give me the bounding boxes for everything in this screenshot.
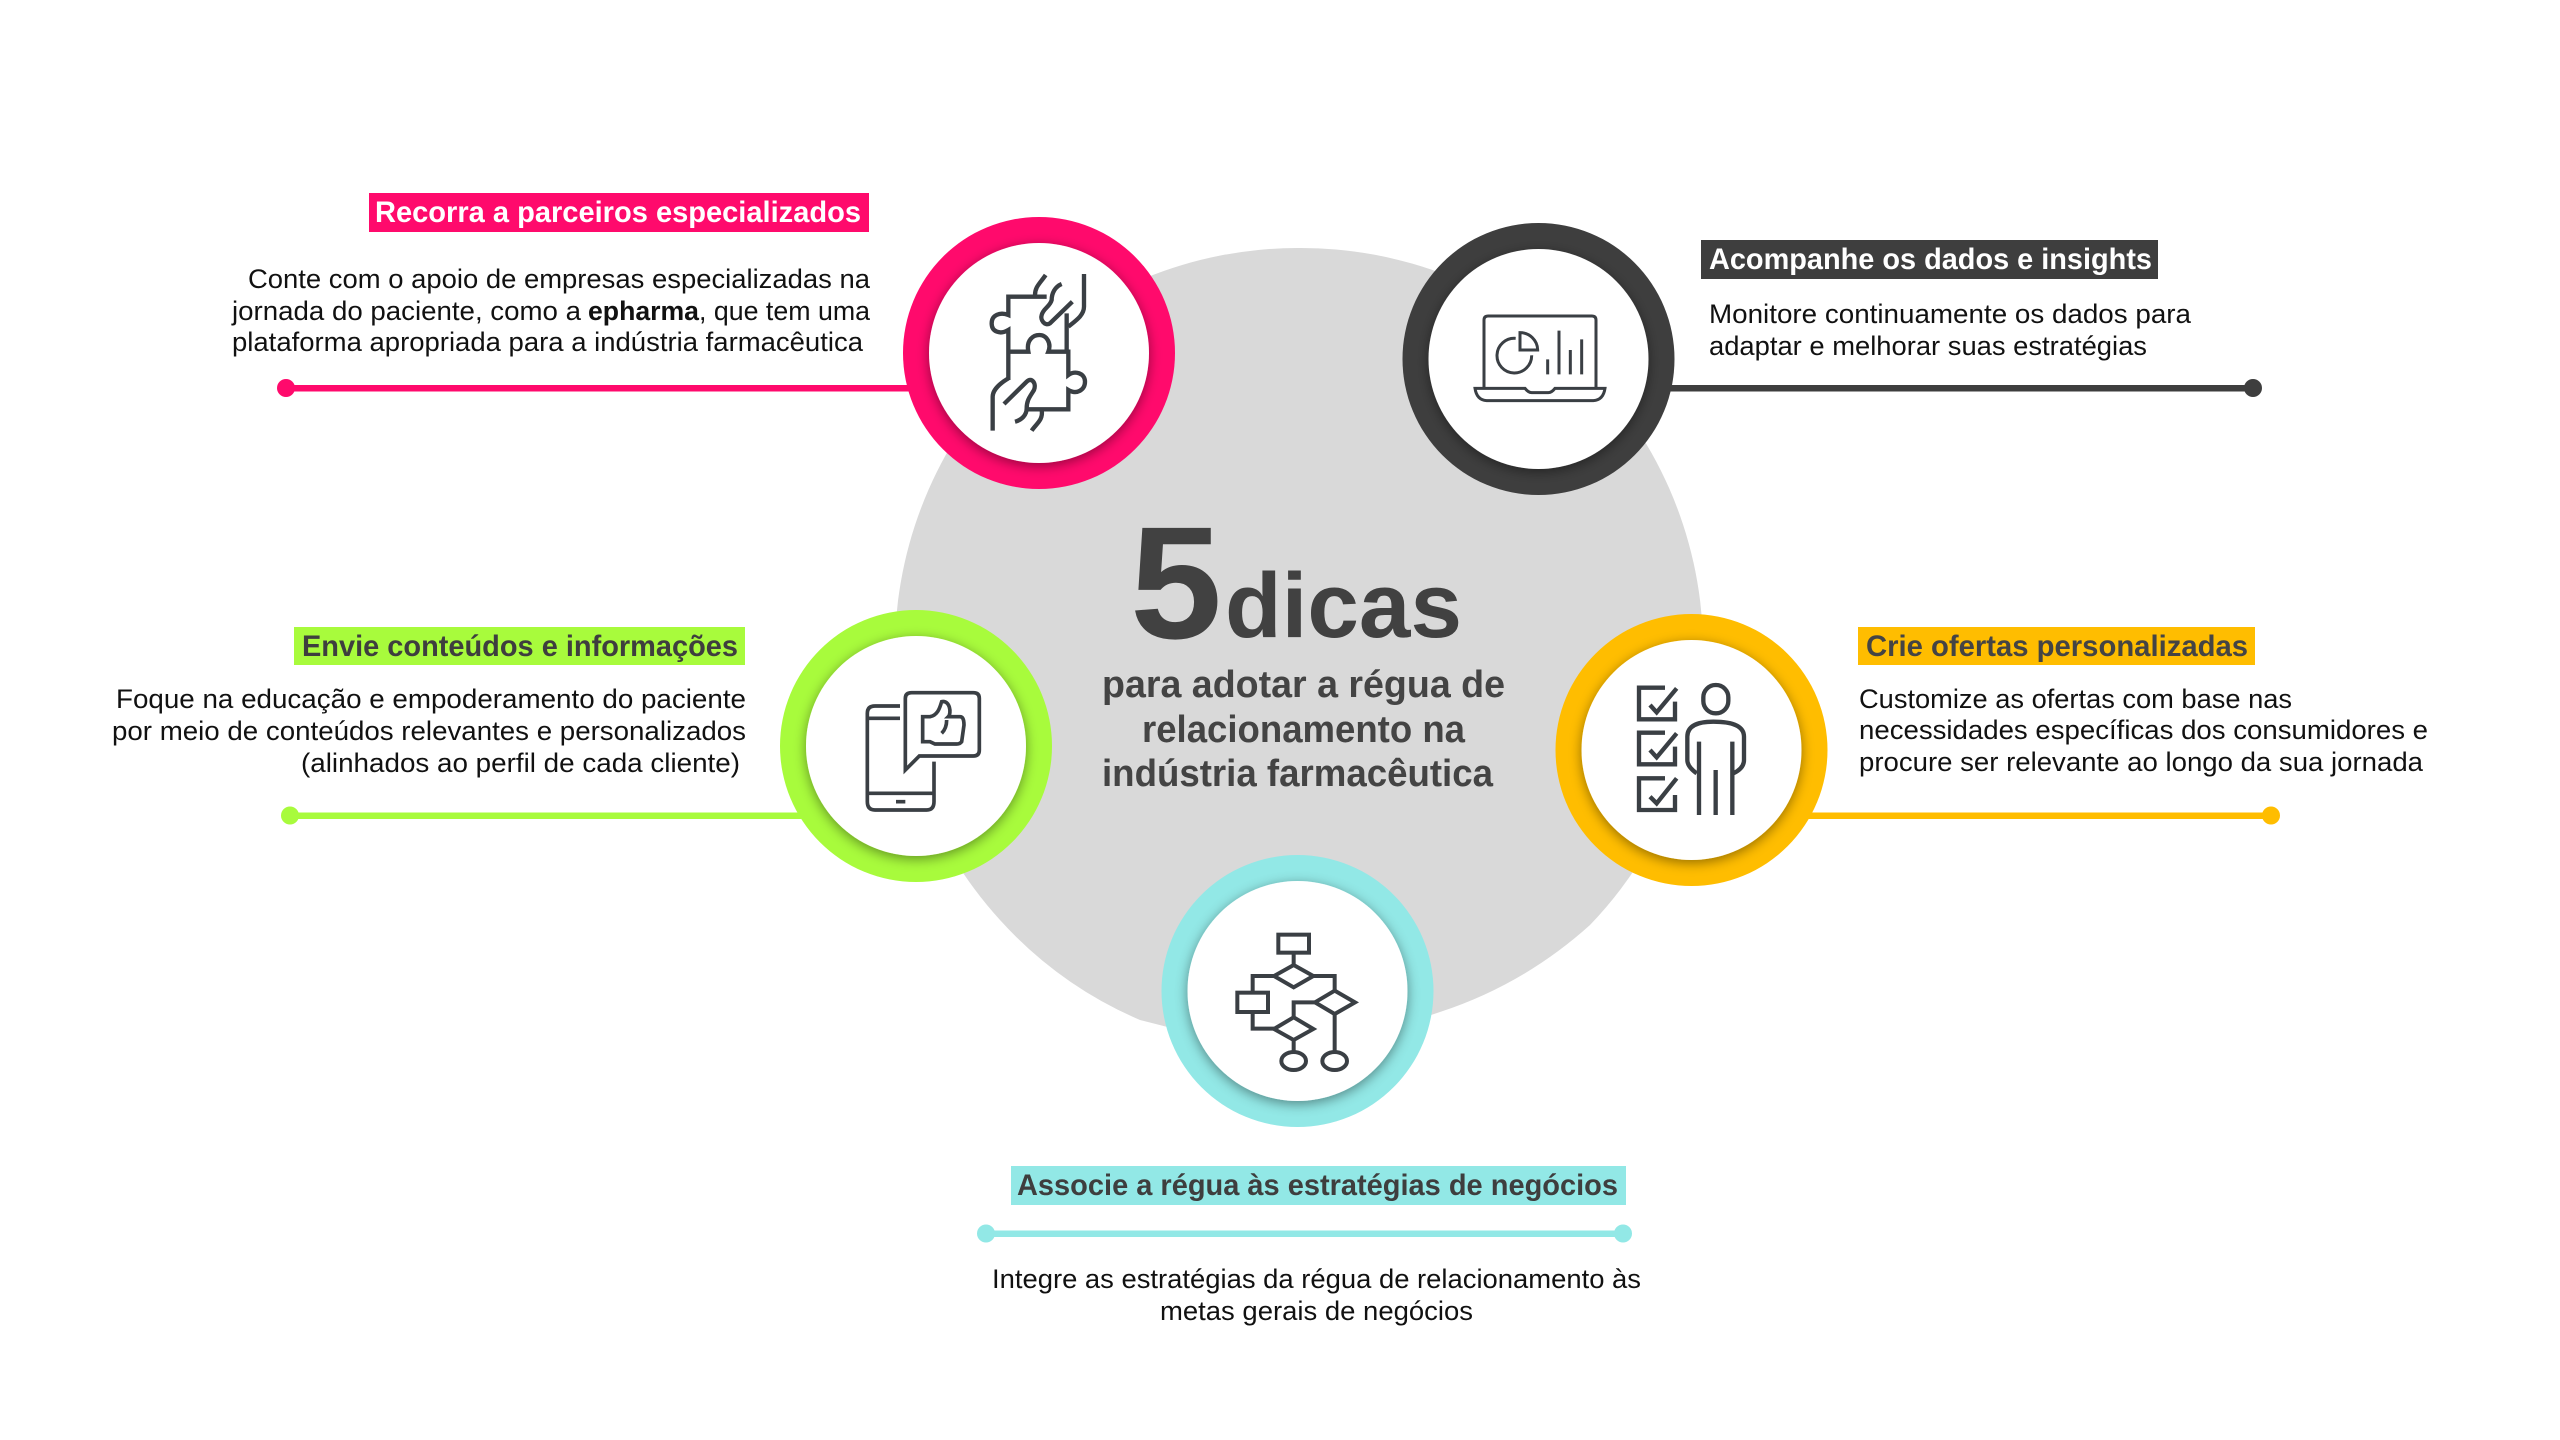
- icon: phone with thumbs up: [867, 693, 979, 810]
- body text yellow: necessidades específicas dos consumidores e: [1859, 715, 2428, 745]
- heading yellow: Crie ofertas personalizadas: [1866, 630, 2248, 663]
- connector line green: [281, 806, 810, 824]
- ring dark: [1402, 223, 1674, 495]
- center title: [1102, 493, 1505, 795]
- subtitle: indústria farmacêutica: [1102, 753, 1494, 795]
- panel: ofertas personalizadas: [1556, 614, 2428, 886]
- body text teal: metas gerais de negócios: [1160, 1296, 1473, 1326]
- big number 5: 5: [1130, 493, 1222, 672]
- ring green: [780, 610, 1052, 882]
- icon: checklist and person: [1639, 685, 1744, 815]
- body text dark: adaptar e melhorar suas estratégias: [1709, 331, 2147, 361]
- body text pink: Conte com o apoio de empresas especializadas na: [248, 264, 871, 294]
- body text green: [112, 684, 746, 778]
- heading green: Envie conteúdos e informações: [302, 630, 738, 663]
- body text teal: Integre as estratégias da régua de relacionamento às: [992, 1264, 1641, 1294]
- connector line teal: [977, 1224, 1632, 1242]
- body text green: (alinhados ao perfil de cada cliente): [301, 748, 740, 778]
- central grey blob: [895, 248, 1703, 1060]
- body text yellow: [1859, 684, 2428, 777]
- panel: parceiros especializados: [231, 193, 1175, 489]
- panel: dados e insights: [1402, 223, 2262, 495]
- connector line pink: [277, 379, 926, 397]
- body text teal: [992, 1264, 1641, 1326]
- icon: flowchart: [1237, 935, 1355, 1070]
- body text green: Foque na educação e empoderamento do paciente: [116, 684, 746, 714]
- body text pink: plataforma apropriada para a indústria farmacêutica: [232, 327, 864, 357]
- heading pink: Recorra a parceiros especializados: [375, 196, 861, 229]
- body text dark: Monitore continuamente os dados para: [1709, 299, 2192, 329]
- icon: puzzle and hands: [992, 274, 1085, 431]
- body text yellow: Customize as ofertas com base nas: [1859, 684, 2292, 714]
- ring pink: [903, 217, 1175, 489]
- connector line dark: [1650, 379, 2262, 397]
- heading dark: Acompanhe os dados e insights: [1709, 243, 2152, 276]
- body text yellow: procure ser relevante ao longo da sua jornada: [1859, 747, 2424, 777]
- subtitle: para adotar a régua de: [1102, 664, 1505, 706]
- heading teal: Associe a régua às estratégias de negócios: [1017, 1169, 1618, 1202]
- body text pink: , que tem uma: [699, 296, 871, 326]
- subtitle: relacionamento na: [1142, 709, 1466, 751]
- word dicas: dicas: [1225, 555, 1462, 657]
- panel: estratégias de negócios: [977, 855, 1641, 1326]
- body text dark: [1709, 299, 2192, 361]
- icon: laptop with charts: [1475, 316, 1605, 401]
- body text pink: epharma: [588, 296, 700, 326]
- panel: conteúdos e informações: [112, 610, 1052, 882]
- subtitle: [1102, 664, 1505, 795]
- body text pink: jornada do paciente, como a: [231, 296, 582, 326]
- ring teal: [1162, 855, 1434, 1127]
- body text green: por meio de conteúdos relevantes e personalizados: [112, 716, 746, 746]
- connector line yellow: [1800, 806, 2280, 824]
- body text pink: [231, 264, 871, 357]
- ring yellow: [1556, 614, 1828, 886]
